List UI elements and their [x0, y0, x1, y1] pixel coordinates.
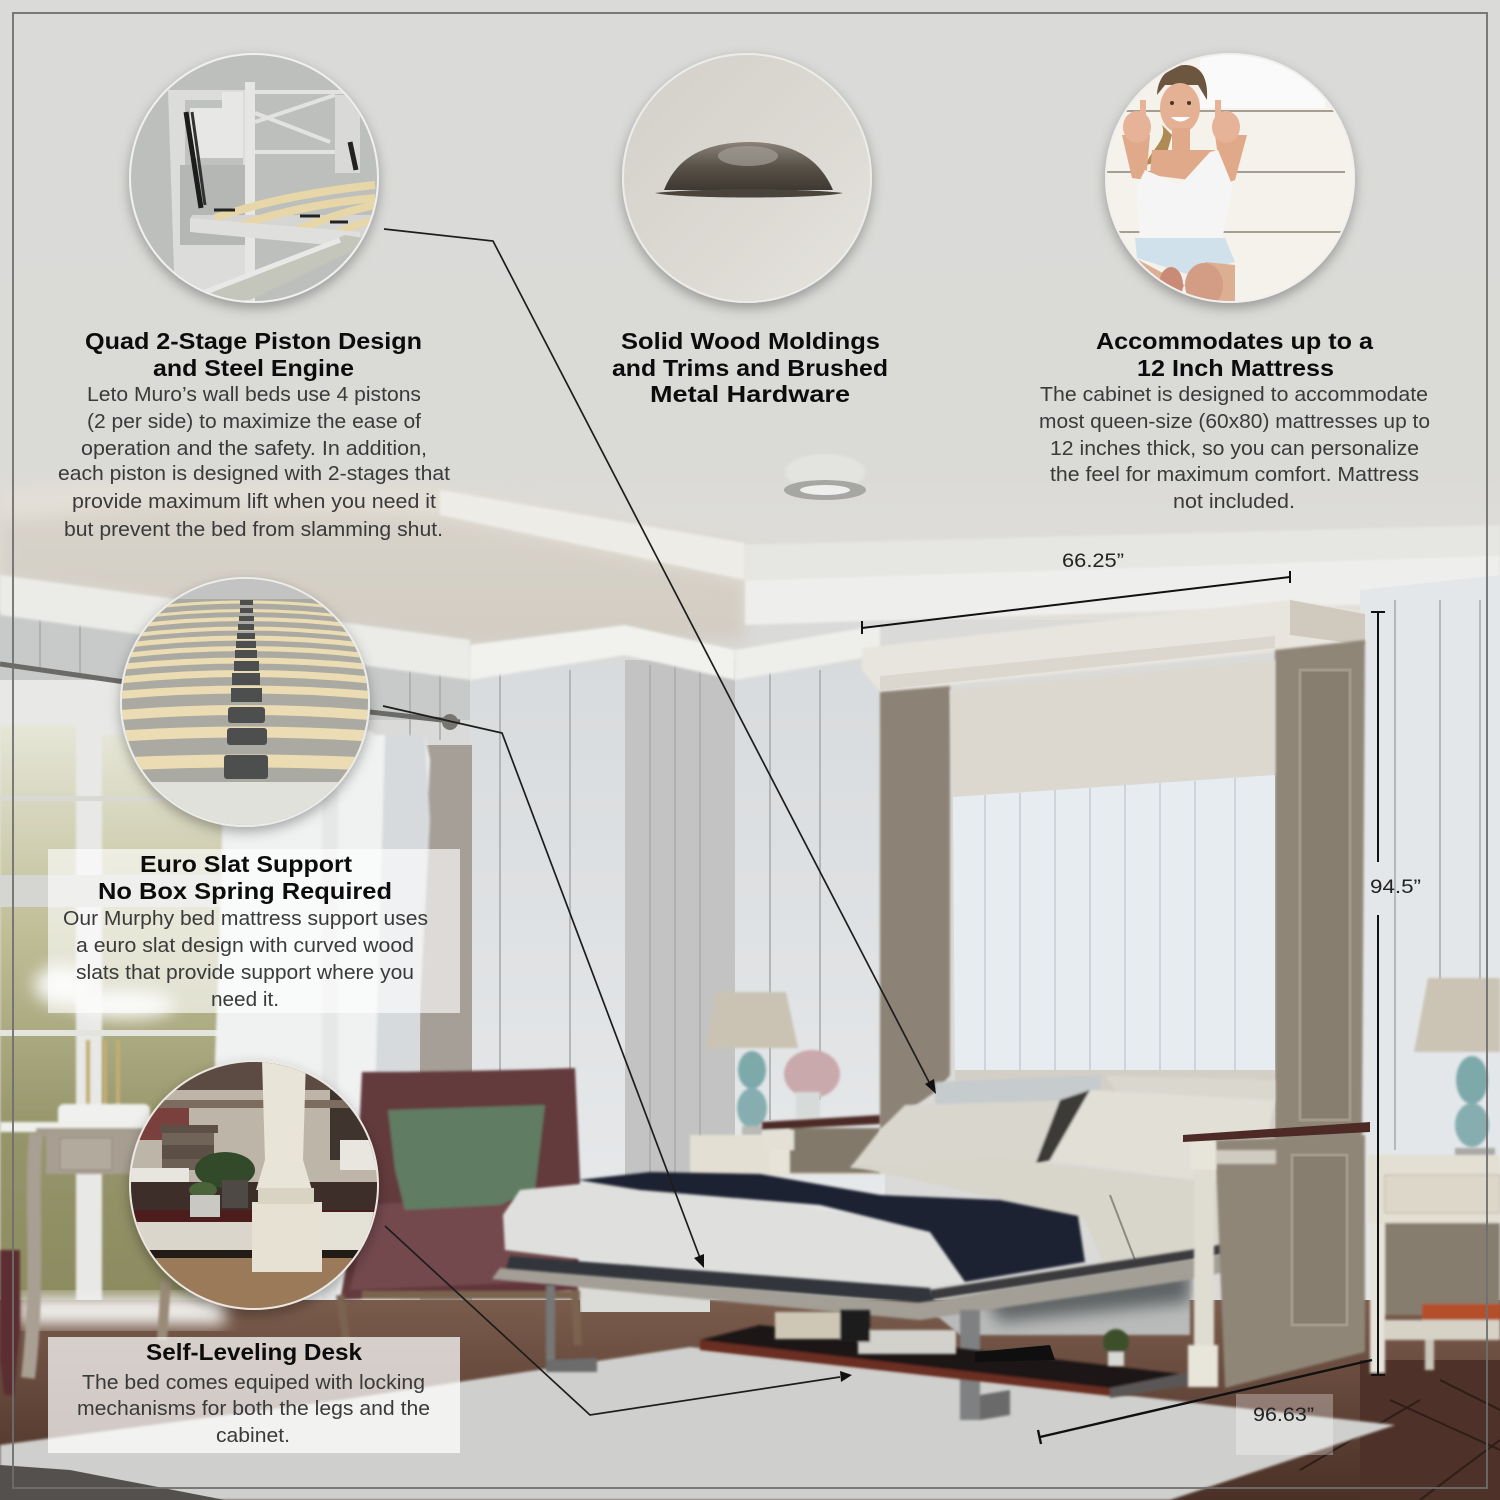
bed legs — [546, 1285, 1010, 1420]
text block: euro slat: Euro Slat Support — [140, 851, 352, 877]
circle: piston engine — [129, 53, 380, 307]
text block: euro slat: need it. — [211, 989, 279, 1011]
text block: moldings: Solid Wood Moldings — [621, 328, 880, 354]
murphy bed — [492, 1070, 1370, 1420]
text block: moldings: Metal Hardware — [650, 381, 850, 407]
text block: euro slat: a euro slat design with curved wood — [76, 935, 414, 957]
left lamp — [705, 992, 798, 1136]
bed platform frame — [492, 1246, 1272, 1320]
text block: piston design: Quad 2-Stage Piston Design — [85, 328, 422, 354]
plant — [195, 1152, 255, 1188]
dimension label: depth: 96.63” — [1253, 1405, 1314, 1426]
text block: mattress: Accommodates up to a — [1096, 328, 1373, 354]
text block: piston design: and Steel Engine — [153, 355, 354, 381]
ceiling light — [784, 454, 866, 500]
circle: desk detail — [129, 1060, 380, 1313]
leader line: piston circle to bed — [384, 229, 936, 1094]
leader line: slat circle to mattress — [383, 706, 704, 1268]
circle: woman on mattress — [1105, 53, 1355, 307]
left nightstand — [690, 1135, 885, 1175]
text block: piston design — [58, 328, 450, 541]
slatted deck edge — [930, 1236, 1270, 1300]
text block: euro slat: No Box Spring Required — [98, 878, 392, 904]
ceiling — [0, 0, 1500, 620]
floor — [0, 1300, 1500, 1500]
walls — [0, 610, 470, 720]
text block: piston design: provide maximum lift when you need it — [72, 491, 436, 513]
crown moldings — [0, 575, 470, 680]
window — [0, 680, 235, 1320]
navy blanket — [578, 1172, 1085, 1282]
mattress — [503, 1182, 975, 1286]
circle: metal cup pull handle — [622, 53, 872, 303]
left console table and planter — [0, 1040, 190, 1395]
books — [160, 1125, 218, 1133]
text block: mattress: 12 Inch Mattress — [1137, 355, 1334, 381]
dimension line: width — [862, 571, 1290, 634]
white back panel — [953, 775, 1275, 1080]
text block: piston design: (2 per side) to maximize the ease of — [87, 411, 421, 433]
text block: mattress: most queen-size (60x80) mattresses up to — [1039, 411, 1430, 433]
text block: self-leveling desk: Self-Leveling Desk — [146, 1339, 362, 1365]
armchair — [340, 1068, 580, 1345]
circle: euro slats — [120, 577, 370, 827]
text block: mattress: not included. — [1173, 491, 1295, 513]
wall bed cabinet — [862, 600, 1365, 1140]
panel: depth label backdrop — [1236, 1394, 1333, 1455]
text block: mattress: the feel for maximum comfort. Mattress — [1050, 464, 1419, 486]
upper inner panel — [950, 660, 1275, 797]
text block: piston design: operation and the safety. In addition, — [81, 438, 427, 460]
panel: self-leveling backdrop — [48, 1337, 460, 1453]
dimension label: height: 94.5” — [1370, 877, 1421, 898]
turned post — [1188, 1140, 1276, 1387]
text block: mattress — [1039, 328, 1430, 513]
headboard — [955, 1070, 1275, 1130]
text block: euro slat: Our Murphy bed mattress support uses — [63, 908, 428, 930]
text block: self-leveling desk: The bed comes equiped with locking — [82, 1372, 425, 1394]
text block: piston design: each piston is designed with 2-stages that — [58, 463, 450, 485]
curtain rod — [0, 664, 460, 722]
books — [775, 1310, 956, 1354]
text block: moldings — [612, 328, 888, 407]
left top arm — [762, 1115, 880, 1174]
text block: self-leveling desk: mechanisms for both the legs and the — [77, 1398, 430, 1420]
dimension label: width: 66.25” — [1062, 551, 1124, 572]
panel: euro slat backdrop — [48, 849, 460, 1013]
rug — [0, 1347, 1395, 1500]
base panel — [129, 1222, 254, 1250]
flowers in vase — [784, 1050, 840, 1118]
wall behind bed lower — [580, 1272, 710, 1312]
text block: mattress: The cabinet is designed to accommodate — [1040, 384, 1428, 406]
cabinet crown — [862, 600, 1365, 692]
curtains — [210, 730, 430, 1320]
icon: cup pull — [655, 142, 843, 198]
text block: euro slat — [63, 851, 428, 1011]
text block: euro slat: slats that provide support where you — [76, 962, 414, 984]
text block: piston design: Leto Muro’s wall beds use 4 pistons — [87, 384, 421, 406]
right lamp and nightstand — [1368, 978, 1500, 1373]
leader line: desk circle to desk — [385, 1226, 852, 1415]
desk shelf — [700, 1325, 1190, 1398]
footboard panel — [1215, 1135, 1365, 1388]
left cabinet side — [880, 686, 950, 1130]
text block: piston design: but prevent the bed from slamming shut. — [64, 519, 443, 541]
white orchids — [34, 965, 175, 1019]
right cabinet side — [1275, 640, 1365, 1140]
dimension line: height — [1371, 612, 1385, 1375]
wood arm top — [1183, 1122, 1370, 1142]
laptop — [975, 1345, 1055, 1362]
dimension line: depth — [1038, 1360, 1372, 1444]
pillar — [256, 1060, 312, 1190]
small plant — [1103, 1329, 1129, 1366]
text block: moldings: and Trims and Brushed — [612, 355, 888, 381]
duvet / mattress top — [850, 1158, 1272, 1268]
text block: self-leveling desk: cabinet. — [216, 1425, 290, 1447]
dark mattress base — [505, 1256, 935, 1304]
text block: self-leveling desk — [77, 1339, 430, 1447]
left armchair edge — [0, 1250, 20, 1395]
pillows — [850, 1075, 1275, 1185]
text block: mattress: 12 inches thick, so you can personalize — [1050, 438, 1419, 460]
